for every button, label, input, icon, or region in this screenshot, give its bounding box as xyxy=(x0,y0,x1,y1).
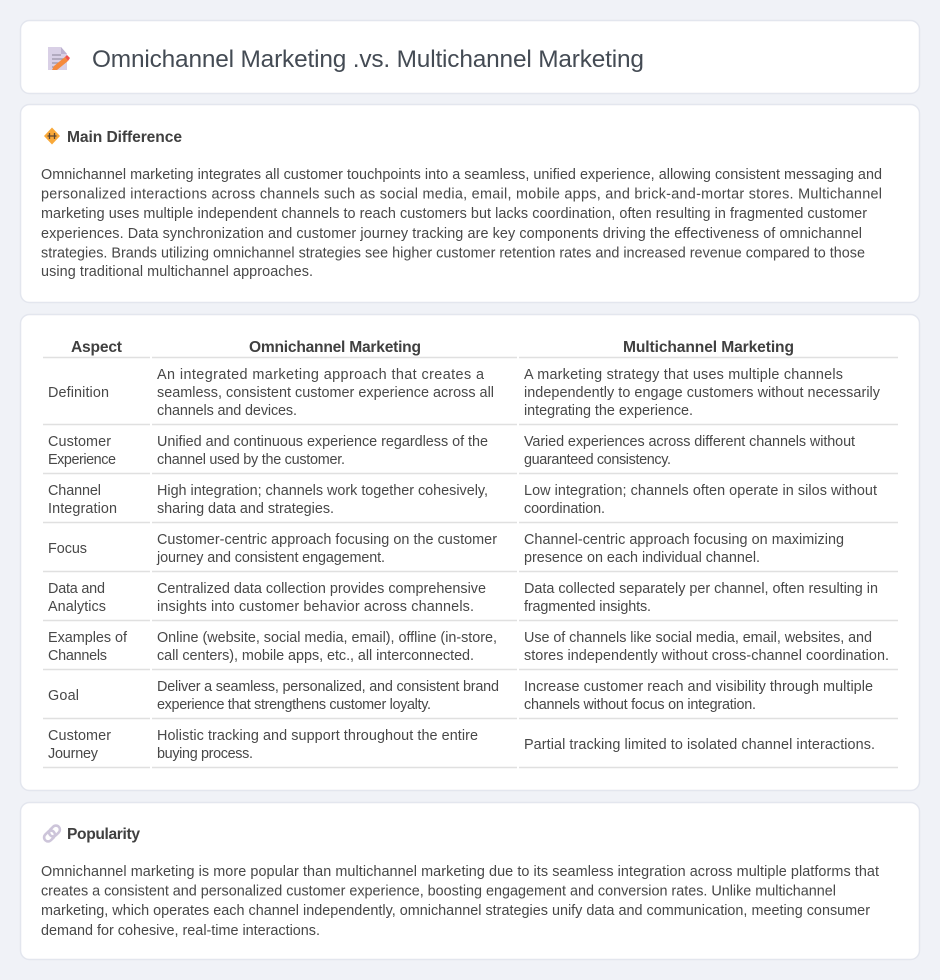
row: definition: seamless, consistent customer experience across all xyxy=(157,385,494,401)
table header: Aspect xyxy=(71,339,122,356)
row: customer journey: Customer xyxy=(48,728,111,744)
row: definition xyxy=(43,367,898,424)
row: goal: Goal xyxy=(48,688,79,704)
row: examples of channels: Channels xyxy=(48,648,107,664)
row: data and analytics: Data collected separately per channel, often resulting in xyxy=(524,581,878,597)
heading: main difference: Main Difference xyxy=(67,129,182,146)
row: customer experience: guaranteed consistency. xyxy=(524,452,671,468)
table header: Multichannel Marketing xyxy=(623,339,794,356)
row: data and analytics: Data and xyxy=(48,581,105,597)
row: channel integration xyxy=(43,483,898,522)
table header: Omnichannel Marketing xyxy=(249,339,421,356)
text block: main difference: personalized interactions across channels such as social media, email, mobile apps, and brick-and-mortar stores. Multichannel xyxy=(41,187,882,203)
row: definition: An integrated marketing approach that creates a xyxy=(157,367,484,383)
text block: main difference: Omnichannel marketing integrates all customer touchpoints into a seamless, unified experience, allowing consistent messaging and xyxy=(41,167,882,183)
row: customer experience: Experience xyxy=(48,452,116,468)
row: examples of channels: stores independently without cross-channel coordination. xyxy=(524,648,889,664)
row: channel integration: High integration; channels work together cohesively, xyxy=(157,483,488,499)
row: data and analytics: Centralized data collection provides comprehensive xyxy=(157,581,486,597)
row: examples of channels: Examples of xyxy=(48,630,128,646)
row: customer experience: Varied experiences across different channels without xyxy=(524,434,855,450)
row: customer experience xyxy=(43,434,898,474)
table header xyxy=(43,339,898,358)
row: focus: Focus xyxy=(48,541,87,557)
text block: popularity: marketing, which operates each channel independently, omnichannel strategies unify data and communication, meeting consumer xyxy=(41,903,870,919)
row: data and analytics xyxy=(43,581,898,620)
row: goal: Increase customer reach and visibility through multiple xyxy=(524,679,873,695)
row: channel integration: sharing data and strategies. xyxy=(157,501,334,517)
row: focus: Channel-centric approach focusing on maximizing xyxy=(524,532,844,548)
icon: document with pencil xyxy=(48,47,70,70)
text block: popularity xyxy=(41,864,879,939)
row: customer journey: Journey xyxy=(48,746,99,762)
row: examples of channels: Online (website, social media, email), offline (in-store, xyxy=(157,630,497,646)
row: goal xyxy=(43,679,898,718)
row: data and analytics: fragmented insights. xyxy=(524,599,651,615)
row: definition: independently to engage customers without necessarily xyxy=(524,385,881,401)
row: customer journey: buying process. xyxy=(157,746,253,762)
text block: main difference xyxy=(41,167,882,280)
row: definition: integrating the experience. xyxy=(524,403,693,419)
panel: title xyxy=(20,20,920,94)
icon: chain link xyxy=(42,824,62,843)
panel: main difference xyxy=(20,104,920,302)
heading: popularity: Popularity xyxy=(67,826,140,843)
text block: popularity: demand for cohesive, real-time interactions. xyxy=(41,923,320,939)
row: customer experience: Customer xyxy=(48,434,111,450)
row: channel integration: Channel xyxy=(48,483,101,499)
row: goal: Deliver a seamless, personalized, and consistent brand xyxy=(157,679,499,695)
panel: comparison table xyxy=(20,314,920,790)
row: customer journey: Holistic tracking and support throughout the entire xyxy=(157,728,478,744)
text block: main difference: strategies. Brands utilizing omnichannel strategies see higher customer retention rates and increased revenue compared to those xyxy=(41,245,865,261)
row: examples of channels xyxy=(43,630,898,670)
row: focus: presence on each individual channel. xyxy=(524,550,760,566)
row: examples of channels: Use of channels like social media, email, websites, and xyxy=(524,630,872,646)
row: focus xyxy=(43,532,898,572)
row: focus: journey and consistent engagement. xyxy=(156,550,385,566)
row: focus: Customer-centric approach focusing on the customer xyxy=(157,532,497,548)
row: goal: channels without focus on integration. xyxy=(524,697,756,713)
row: definition: A marketing strategy that uses multiple channels xyxy=(524,367,843,383)
row: customer experience: Unified and continuous experience regardless of the xyxy=(157,434,488,450)
text block: popularity: Omnichannel marketing is more popular than multichannel marketing due to its seamless integration across multiple platforms that xyxy=(41,864,879,880)
title: Omnichannel Marketing .vs. Multichannel Marketing xyxy=(92,46,644,73)
row: data and analytics: Analytics xyxy=(48,599,106,615)
row: customer experience: channel used by the customer. xyxy=(157,452,345,468)
row: definition: channels and devices. xyxy=(157,403,297,419)
text block: main difference: using traditional multichannel approaches. xyxy=(41,264,313,280)
row: channel integration: coordination. xyxy=(524,501,605,517)
row: customer journey: Partial tracking limited to isolated channel interactions. xyxy=(524,737,875,753)
row: data and analytics: insights into customer behavior across channels. xyxy=(157,599,474,615)
text block: popularity: creates a consistent and personalized customer experience, boosting engagement and conversion rates. Unlike multichannel xyxy=(41,884,836,900)
row: definition: Definition xyxy=(48,385,109,401)
row: goal: experience that strengthens customer loyalty. xyxy=(157,697,431,713)
panel: popularity xyxy=(20,802,920,960)
row: customer journey xyxy=(43,728,898,768)
text block: main difference: marketing uses multiple independent channels to reach customers but lacks coordination, often resulting in fragmented customer xyxy=(41,206,867,222)
row: examples of channels: call centers), mobile apps, etc., all interconnected. xyxy=(157,648,474,664)
icon: diamond sign xyxy=(44,128,60,144)
text block: main difference: experiences. Data synchronization and customer journey tracking are key components driving the effectiveness of omnichannel xyxy=(41,226,862,242)
row: channel integration: Low integration; channels often operate in silos without xyxy=(524,483,877,499)
row: channel integration: Integration xyxy=(48,501,117,517)
